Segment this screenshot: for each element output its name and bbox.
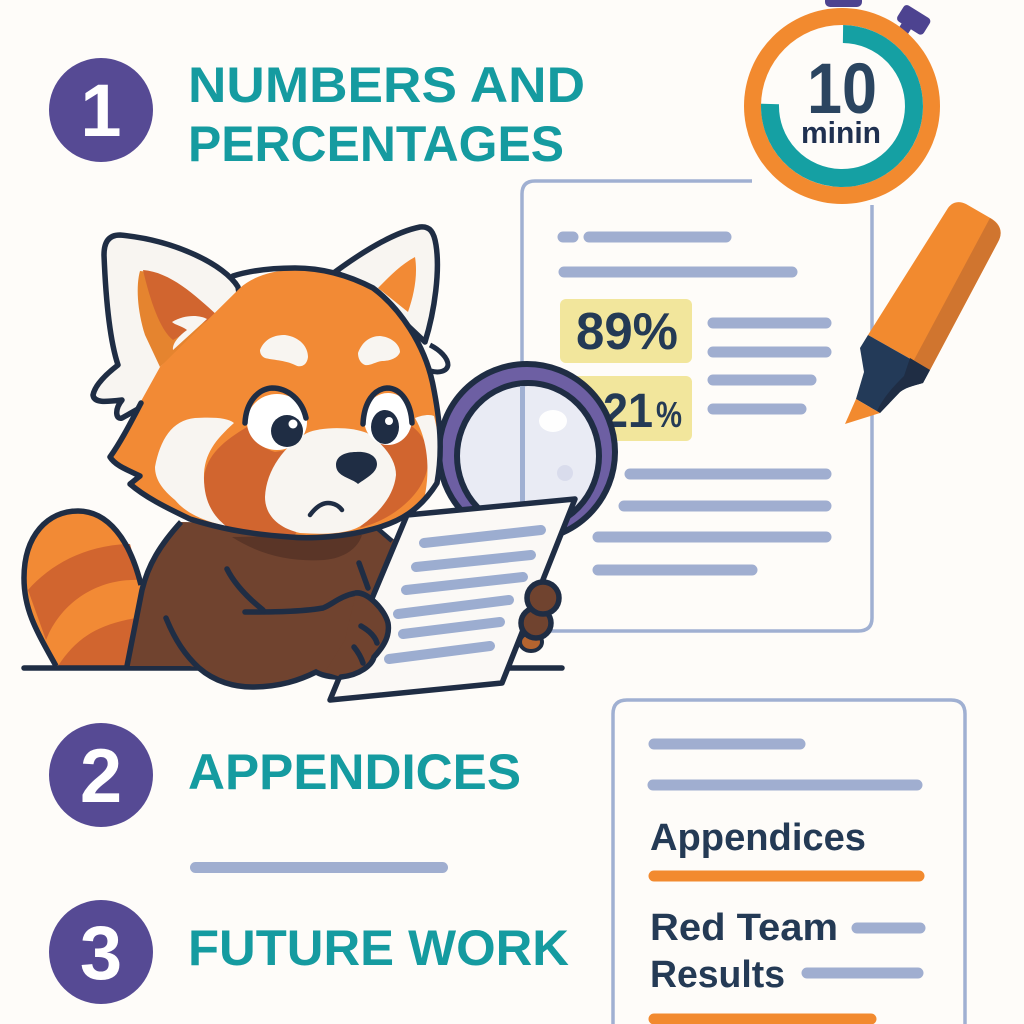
step 1 badge (49, 58, 153, 162)
magnifying glass (439, 364, 615, 540)
paw outline (341, 593, 388, 677)
document panel with highlighted percentages (522, 181, 872, 631)
red panda (24, 227, 575, 700)
right cheek white (415, 415, 439, 495)
muzzle (265, 428, 396, 534)
left cheek white (155, 418, 234, 526)
left paw over paper (325, 593, 388, 677)
head (93, 227, 448, 538)
divider between steps (190, 862, 448, 873)
face (110, 270, 440, 536)
mouth (310, 503, 342, 515)
highlight: 21%: % (656, 394, 682, 435)
ear tuft (430, 345, 448, 372)
appendices document panel (613, 700, 965, 1024)
step 3 badge (49, 900, 153, 1004)
step 2 badge (49, 723, 153, 827)
heading: numbers and percentages (188, 57, 585, 172)
label: appendices: Appendices (650, 817, 866, 859)
left inner ear (138, 270, 217, 367)
label: red team results: Red Team (650, 907, 838, 949)
eyebrow markings (260, 335, 308, 366)
label: red team results: Results (650, 954, 785, 996)
paper text lines (389, 530, 541, 659)
highlighter pen (845, 202, 1001, 424)
label: red team results (650, 907, 838, 996)
panel text lines (653, 744, 920, 973)
heading: appendices: APPENDICES (188, 744, 521, 800)
heading: numbers and percentages: PERCENTAGES (188, 116, 564, 172)
right cheek patch (360, 425, 428, 528)
step 2 badge: 2 (80, 734, 122, 819)
right paw (520, 582, 559, 651)
orange rules (654, 876, 919, 1019)
paper held by panda (330, 499, 575, 700)
right ear (335, 227, 437, 342)
stopwatch buttons (825, 0, 932, 36)
left cheek patch (204, 427, 310, 535)
step 3 badge: 3 (80, 911, 122, 996)
timer progress arc (770, 34, 914, 178)
timer unit: minin (801, 115, 881, 150)
body and arm (127, 522, 395, 687)
tail (24, 511, 141, 666)
nose (336, 452, 377, 484)
document text lines (563, 237, 826, 570)
stopwatch timer (744, 0, 940, 204)
timer value: 10 (807, 50, 877, 129)
highlight: 89%: 89% (576, 303, 678, 361)
highlight: 21% (570, 376, 692, 441)
head outline (110, 268, 440, 538)
right eye (363, 388, 412, 445)
highlight: 21%: 21 (603, 385, 653, 438)
step 1 badge: 1 (80, 69, 122, 152)
heading: numbers and percentages: NUMBERS AND (188, 57, 585, 113)
ground line (24, 665, 562, 671)
left eye (245, 388, 307, 450)
left ear (93, 235, 240, 418)
right inner ear (378, 257, 416, 312)
heading: future work: FUTURE WORK (188, 920, 569, 976)
